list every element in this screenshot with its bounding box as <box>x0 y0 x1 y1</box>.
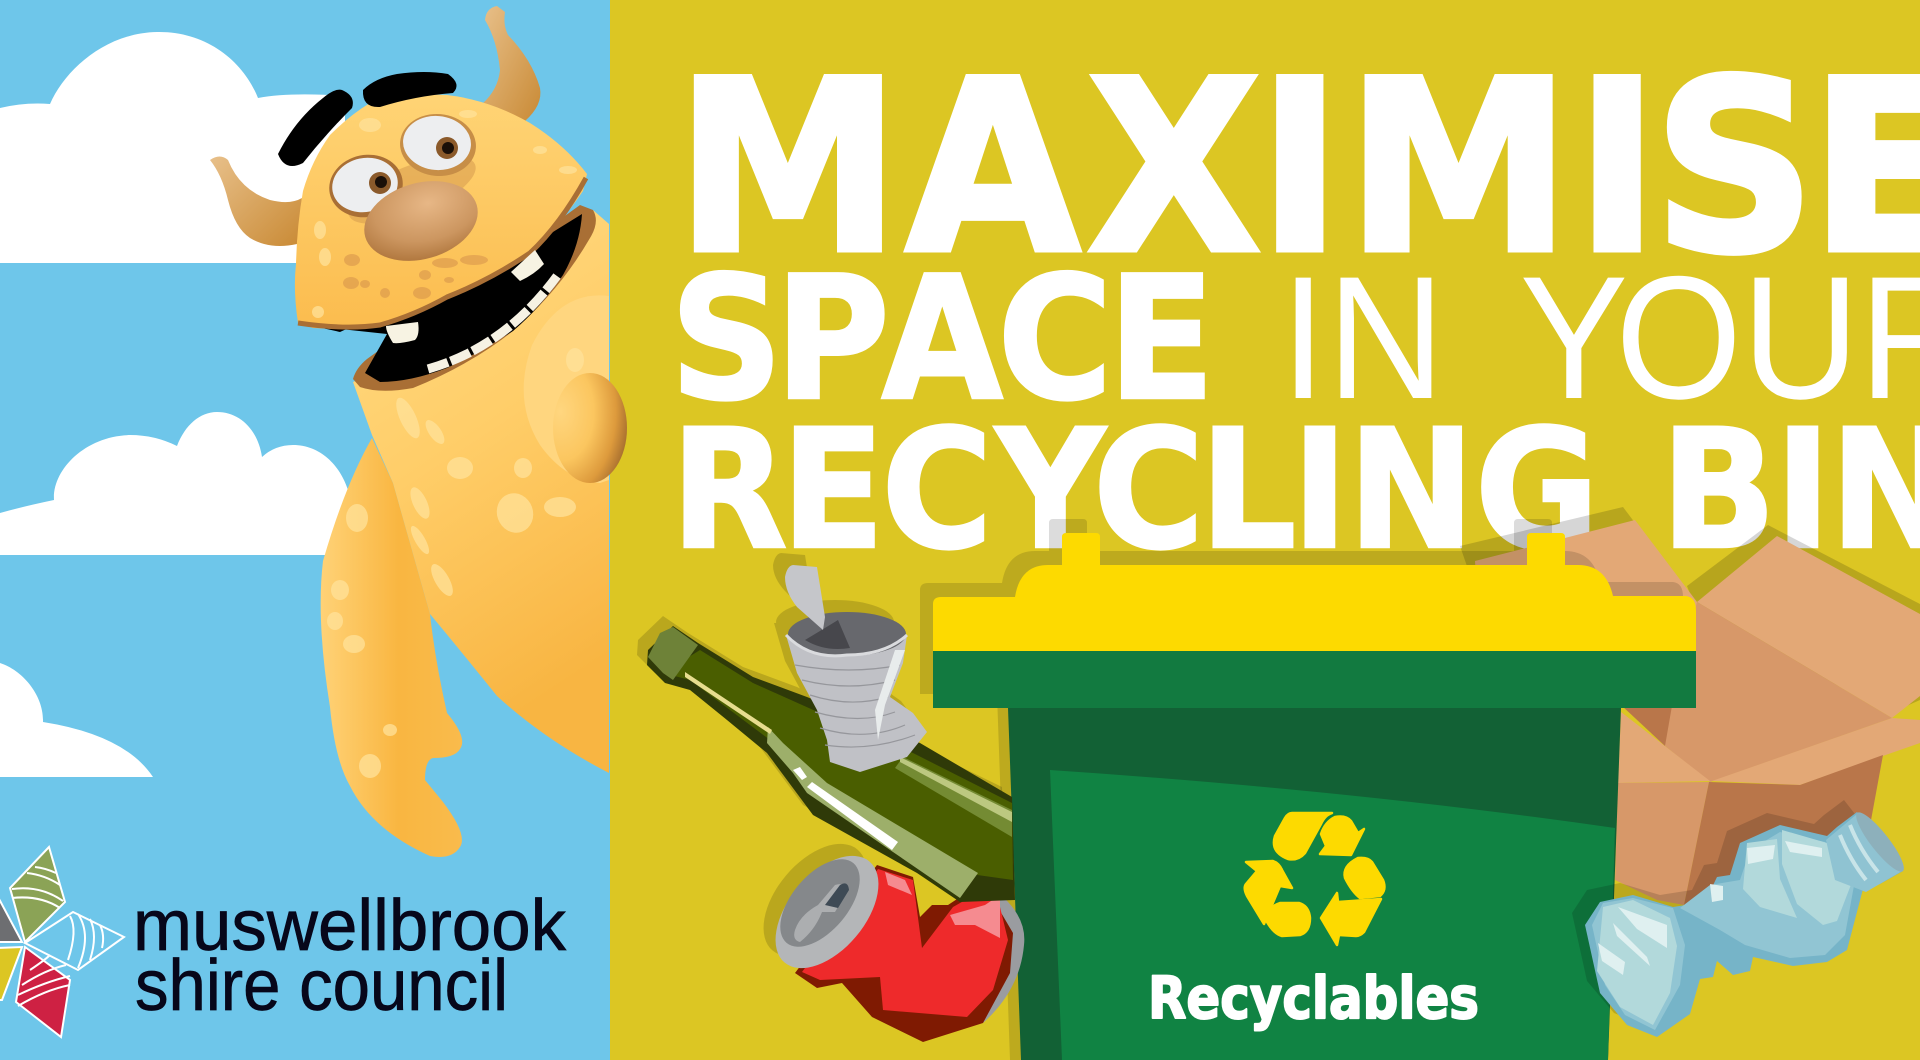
box: inside panel <box>1665 602 1892 782</box>
logo: grey petal <box>0 897 22 942</box>
small item shadows <box>637 553 1005 975</box>
tin: highlight <box>875 650 905 740</box>
box: front left face <box>1615 782 1709 905</box>
logo: council star mark <box>0 847 124 1037</box>
logo word: muswellbrook: muswellbrook <box>133 886 567 966</box>
cloud: top <box>0 32 345 263</box>
tin can <box>785 565 927 772</box>
monster: head pale spots <box>312 110 577 318</box>
logo text: muswellbrook shire council <box>133 886 567 1026</box>
shadow: red can <box>743 825 887 975</box>
tin: body <box>786 635 927 772</box>
box: front right face <box>1684 755 1883 905</box>
cloud: bottom <box>0 663 153 777</box>
panel: blue sky <box>0 0 610 1060</box>
plastic: mid tone <box>1680 832 1855 958</box>
bottle: dark edge <box>647 626 1015 902</box>
bin: front panel <box>1050 770 1615 1060</box>
plastic: highlight 3 <box>1598 943 1625 975</box>
can: end rim right <box>983 882 1024 1023</box>
can: pull tab <box>794 884 848 942</box>
plastic bottle shadow <box>1572 800 1890 1025</box>
bottle: upper highlight <box>900 757 1012 822</box>
bottle: neck foil <box>648 627 698 680</box>
bin: rim band <box>933 651 1696 708</box>
box: front left flap <box>1618 712 1710 783</box>
monster: upper tooth left <box>386 322 419 343</box>
monster character <box>210 6 627 857</box>
box: inner shade <box>1621 705 1680 746</box>
bottle: white highlight <box>793 767 807 780</box>
tin: rim <box>786 635 907 656</box>
can: top lid <box>755 837 899 987</box>
tin: ridges <box>795 665 915 747</box>
cloud: middle <box>0 412 348 555</box>
box: back right flap <box>1697 536 1920 718</box>
monster: horn right <box>482 6 540 121</box>
plastic: front panel <box>1743 839 1797 918</box>
box: front right flap <box>1712 718 1920 785</box>
icon: recycling symbol <box>1245 813 1384 945</box>
monster: head freckles <box>343 254 488 299</box>
monster: head <box>295 95 587 329</box>
plastic: crumpled light <box>1597 900 1677 1025</box>
plastic: cap opening <box>1850 807 1910 877</box>
bottle: white highlight long <box>807 782 898 850</box>
monster: eyebrow left <box>278 90 353 166</box>
red crushed can <box>755 837 1024 1042</box>
monster: lower teeth <box>428 276 557 369</box>
glass bottle <box>647 626 1015 902</box>
tin: interior <box>788 612 906 656</box>
monster: lower jaw rim <box>353 205 596 391</box>
bottle: upper band <box>895 757 1012 837</box>
bin label: Recyclables: Recyclables <box>1148 964 1479 1032</box>
monster: nose <box>355 168 487 274</box>
monster: eye socket shade <box>340 142 484 238</box>
monster: body spots <box>327 348 584 778</box>
monster: head lip <box>298 178 586 327</box>
cardboard box <box>1475 520 1920 905</box>
plastic bottle <box>1585 807 1910 1037</box>
plastic: neck rings <box>1840 825 1878 880</box>
logo: blue petal <box>25 912 124 970</box>
bin: yellow lid <box>933 533 1696 651</box>
box shadow <box>1460 507 1920 712</box>
plastic: highlight 6 <box>1710 884 1723 902</box>
can: red body <box>802 869 1008 1017</box>
bottle: lower band <box>767 727 978 898</box>
tin: interior dark <box>805 620 850 649</box>
monster: arm nub <box>553 373 627 483</box>
monster: eye left <box>323 148 409 224</box>
monster: stub arm <box>524 295 609 483</box>
shadow: tin can <box>773 553 915 760</box>
can: highlight <box>885 872 912 895</box>
can: highlight crease <box>950 895 1000 938</box>
plastic: crumpled end <box>1592 898 1685 1030</box>
monster: torso <box>353 210 609 773</box>
bin shadow <box>920 519 1683 1060</box>
logo word: shire council: shire council <box>135 946 508 1026</box>
shadow: glass bottle <box>637 616 1005 892</box>
recycling bin <box>933 533 1696 1060</box>
monster: upper tooth right <box>511 250 544 281</box>
logo: red petal <box>16 947 70 1037</box>
plastic: highlight <box>1618 907 1667 948</box>
plastic: highlight 4 <box>1747 845 1775 864</box>
monster: horn left <box>210 156 302 246</box>
title line: RECYCLING BIN: RECYCLING BIN <box>671 395 1920 587</box>
monster: back arm <box>321 438 462 857</box>
box: back left flap <box>1475 520 1697 640</box>
can: lid inner <box>765 845 875 961</box>
tin: peeled lid <box>785 565 825 630</box>
plastic: highlight 2 <box>1613 923 1650 966</box>
can: tab hole <box>825 883 849 908</box>
logo: yellow petal <box>0 947 22 1000</box>
plastic: outline <box>1585 812 1903 1037</box>
title <box>670 30 1920 587</box>
title line: SPACE: SPACE <box>670 239 1215 439</box>
bottle: neck highlight <box>685 672 772 734</box>
monster: mouth <box>313 214 582 382</box>
logo: petal curves <box>12 867 103 1006</box>
can: dark shading <box>795 865 1013 1042</box>
bin: body <box>1008 708 1621 1060</box>
plastic: side panel <box>1782 830 1852 925</box>
monster: eye right <box>397 111 479 179</box>
bottle: body <box>663 650 1013 880</box>
plastic: neck <box>1826 814 1902 892</box>
plastic: highlight 5 <box>1785 841 1822 857</box>
logo: green petal <box>10 847 65 942</box>
monster: eyebrow right <box>363 72 457 107</box>
